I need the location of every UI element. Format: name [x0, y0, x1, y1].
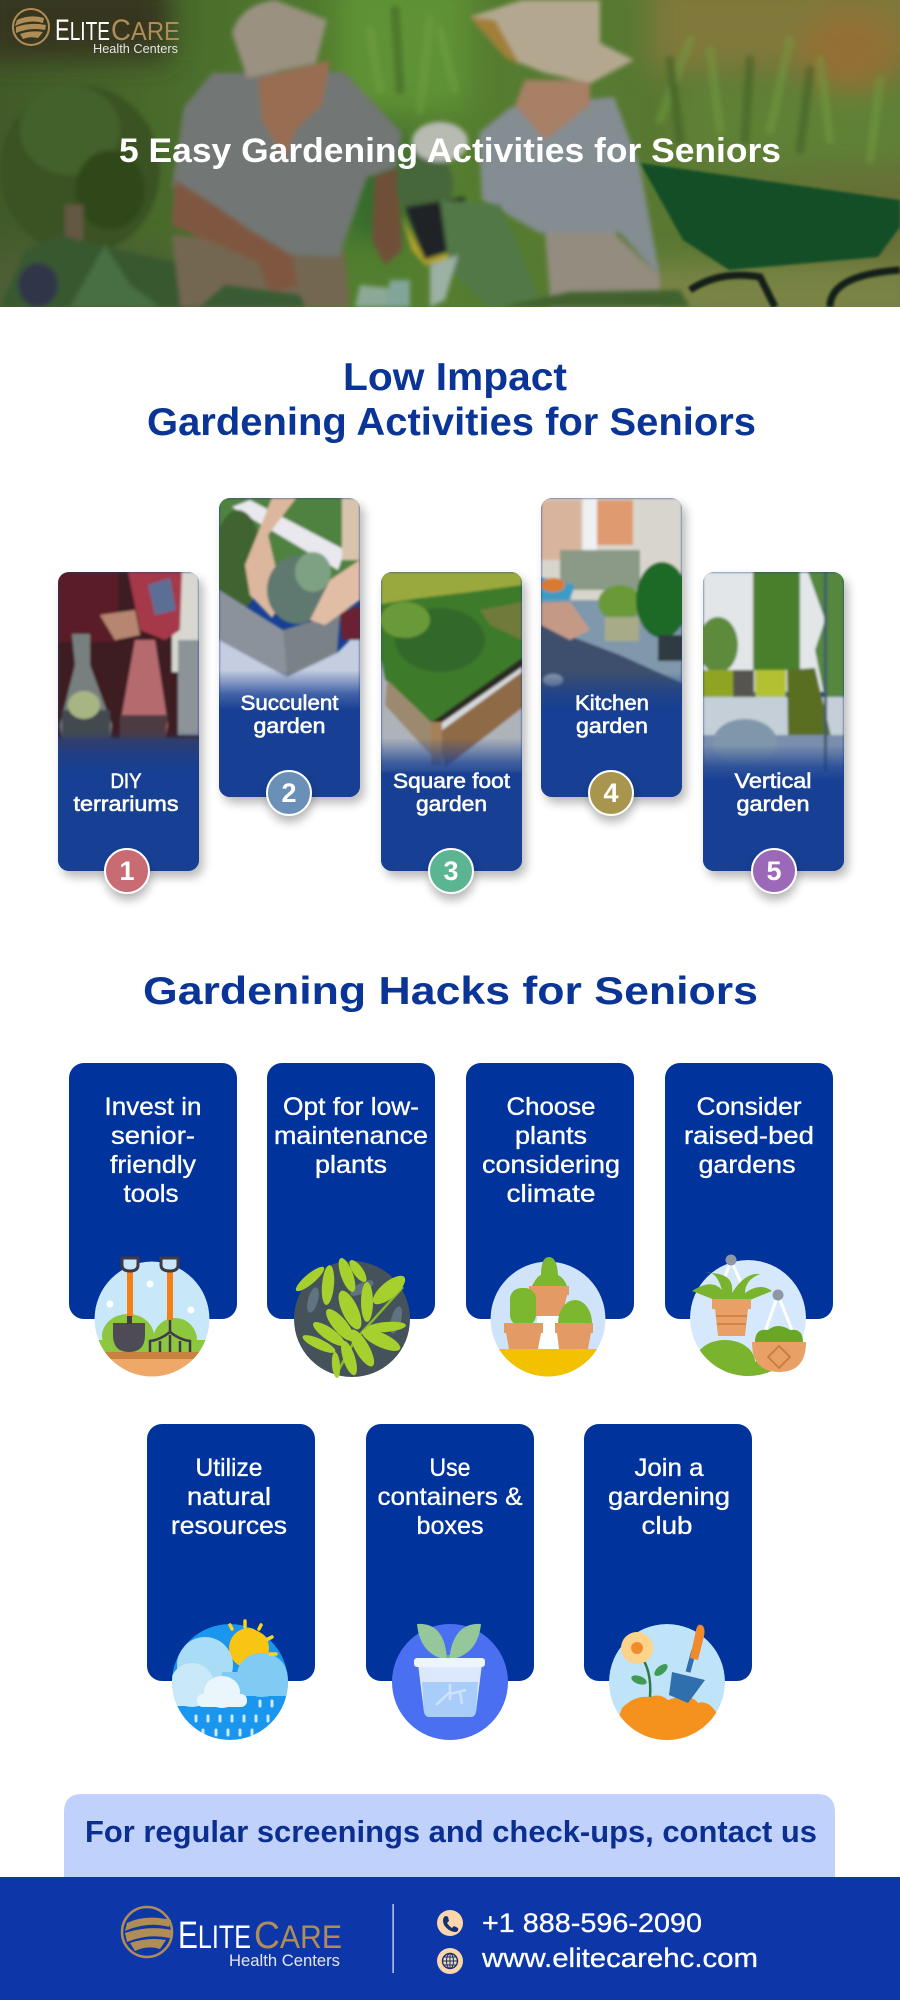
label: DIY [110, 770, 142, 793]
logo: Elite Care footer: CARE [254, 1915, 342, 1957]
text: Utilize [196, 1454, 262, 1482]
label: Vertical [734, 770, 812, 793]
icon: cactus pots [490, 1257, 610, 1379]
label [240, 692, 339, 738]
text: Opt for low- [283, 1093, 419, 1121]
footer [0, 1877, 900, 2000]
number badge 2: 2 [281, 778, 297, 808]
number badge 5 [752, 849, 797, 900]
icon: hanging planters [690, 1254, 806, 1388]
panel: hack 3 [466, 1063, 634, 1379]
panel: hack 7 [584, 1424, 752, 1745]
heading: Gardening Hacks: Gardening Hacks for Seniors [143, 970, 758, 1013]
label [734, 770, 812, 816]
phone number: +1 888-596-2090 [482, 1908, 702, 1938]
label: garden [736, 793, 810, 816]
man [172, 0, 402, 307]
icon: phone [437, 1910, 463, 1936]
text: maintenance [274, 1122, 428, 1150]
hero banner [0, 0, 900, 325]
left shrub [2, 88, 181, 307]
icon: seedling in cup [392, 1624, 508, 1740]
text: natural [187, 1483, 271, 1511]
photo: kitchen garden [541, 498, 688, 799]
wheelbarrow [640, 163, 900, 307]
text: club [642, 1512, 692, 1540]
icon: globe [437, 1948, 463, 1974]
panel: activity card 5 [698, 572, 848, 900]
text: friendly [110, 1151, 197, 1179]
panel: contact callout [64, 1794, 835, 1877]
number badge 5: 5 [766, 856, 782, 886]
background foliage texture [370, 10, 880, 160]
label [393, 770, 510, 816]
icon: sun, cloud and rain [170, 1621, 292, 1740]
text [608, 1454, 730, 1540]
panel: activity card 3 [380, 572, 526, 900]
logo: Elite Care top: CARE [111, 14, 180, 47]
central pot and flowers [355, 122, 540, 307]
label: Square foot [393, 770, 510, 793]
heading: Low Impact: Low Impact [343, 356, 567, 399]
text: Join a [634, 1454, 704, 1482]
text: plants [515, 1122, 587, 1150]
text [482, 1093, 620, 1208]
text: boxes [416, 1512, 484, 1540]
text: raised-bed [684, 1122, 814, 1150]
number badge 1: 1 [119, 856, 135, 886]
panel: activity card 2 [214, 498, 364, 822]
text: Invest in [104, 1093, 202, 1121]
label: Succulent [240, 692, 339, 715]
number badge 4 [589, 771, 634, 822]
text: gardens [698, 1151, 796, 1179]
photo: terrariums [58, 572, 199, 871]
panel: hack 6 [366, 1424, 534, 1740]
panel: hack 1 [69, 1063, 237, 1382]
label: garden [254, 715, 326, 738]
logo: Elite Care top: ELITE [55, 14, 110, 47]
icon: garden tools [94, 1256, 210, 1376]
text: Choose [506, 1093, 596, 1121]
number badge 1 [105, 849, 150, 900]
panel: activity card 4 [541, 498, 688, 822]
label: Kitchen [575, 692, 649, 715]
text: tools [124, 1180, 178, 1208]
label: terrariums [74, 793, 178, 816]
text: containers & [378, 1483, 523, 1511]
label: garden [416, 793, 487, 816]
text [104, 1093, 202, 1208]
panel: hack 2 [267, 1063, 435, 1378]
logo: Elite Care footer [122, 1907, 342, 1970]
panel: hack 5 [147, 1424, 315, 1740]
number badge 4: 4 [603, 778, 619, 808]
number badge 2 [267, 771, 312, 822]
woman [470, 0, 660, 307]
photo: succulents [214, 498, 360, 799]
hero photo: seniors gardening [0, 0, 900, 325]
website: www.elitecarehc.com [481, 1943, 758, 1973]
icon: flower and trowel [609, 1624, 725, 1745]
text: Consider [696, 1093, 802, 1121]
text [684, 1093, 814, 1179]
callout text: For regular screenings and check-ups, contact us [85, 1814, 817, 1849]
panel: activity card 1 [58, 572, 203, 900]
text: climate [506, 1180, 596, 1208]
text [274, 1093, 428, 1179]
number badge 3: 3 [443, 856, 459, 886]
text: Use [430, 1454, 470, 1482]
title: 5 Easy Gardening Activities for Seniors [119, 132, 781, 170]
text: plants [315, 1151, 387, 1179]
text [171, 1454, 287, 1540]
logo: Elite Care top: Health Centers [93, 41, 178, 56]
label: garden [576, 715, 648, 738]
text: senior- [111, 1122, 195, 1150]
text: gardening [608, 1483, 730, 1511]
foreground plants [200, 285, 690, 307]
text: considering [482, 1151, 620, 1179]
heading: Low Impact [147, 356, 756, 444]
panel: hack 4 [665, 1063, 833, 1388]
logo: Elite Care top [13, 9, 180, 56]
photo: square foot garden [380, 572, 522, 874]
number badge 3 [429, 849, 474, 900]
icon: leaves [293, 1256, 410, 1378]
text: resources [171, 1512, 287, 1540]
label [575, 692, 649, 738]
text [378, 1454, 523, 1540]
photo: vertical garden [698, 572, 844, 875]
logo: Elite Care footer: ELITE [178, 1915, 251, 1957]
heading: Low Impact: Gardening Activities for Seniors [147, 401, 756, 444]
label [74, 770, 178, 816]
logo: Elite Care footer: Health Centers [229, 1951, 340, 1970]
